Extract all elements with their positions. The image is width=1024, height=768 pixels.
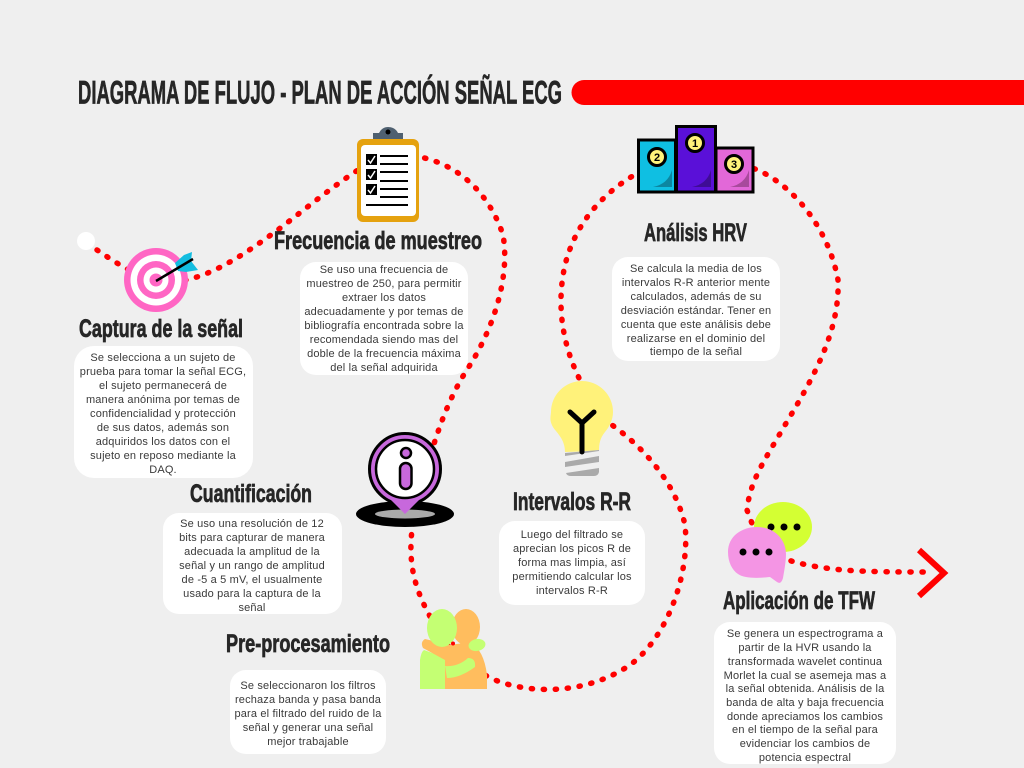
- text card: [300, 262, 468, 375]
- body text: Se genera un espectrograma a: [727, 628, 884, 640]
- heading: Frecuencia de muestreo: [274, 227, 482, 255]
- icon: target with arrow: [124, 248, 198, 312]
- body text: Se uso una frecuencia de: [320, 264, 448, 276]
- body text: para el filtrado del ruido de la: [234, 708, 382, 720]
- body text: extraer los datos: [342, 292, 426, 304]
- body text: calculados, además de su: [630, 291, 762, 303]
- end arrow: [919, 550, 944, 596]
- body text: realizarse en el dominio del: [627, 333, 765, 345]
- panel: intervalos R-R: [499, 488, 645, 605]
- body text: bits para capturar de manera: [179, 532, 326, 544]
- panel: pre-procesamiento: [226, 630, 390, 754]
- body text: manera anónima por temas de: [86, 394, 240, 406]
- icon: light bulb: [550, 381, 613, 476]
- body text: adecuadamente y por temas de: [304, 306, 464, 318]
- body text: sujeto en reposo mediante la: [90, 450, 237, 462]
- body text: usado para la captura de la: [183, 588, 322, 600]
- panel: frecuencia de muestreo: [274, 227, 482, 375]
- icon: speech bubbles: [728, 502, 812, 583]
- body text: confidencialidad y protección: [90, 408, 236, 420]
- body text: del la señal adquirida: [330, 362, 438, 374]
- body text: de sus datos, además son: [97, 422, 229, 434]
- body text: tiempo de la señal: [650, 346, 742, 358]
- body text: Se uso una resolución de 12: [180, 518, 324, 530]
- heading: Captura de la señal: [79, 315, 243, 343]
- body text: en el tiempo de la señal para: [732, 724, 879, 736]
- body text: forma mas limpia, así: [518, 557, 626, 569]
- body text: Luego del filtrado se: [521, 529, 623, 541]
- body text: doble de la frecuencia máxima: [307, 348, 462, 360]
- body text: cuenta que este análisis debe: [621, 319, 771, 331]
- body text: Se seleccionaron los filtros: [240, 680, 376, 692]
- body text: DAQ.: [149, 464, 177, 476]
- body text: Se selecciona a un sujeto de: [90, 352, 236, 364]
- text card: [230, 670, 386, 754]
- icon: podium: 1: [692, 138, 698, 150]
- icon: two people hugging: [420, 609, 487, 689]
- panel: captura de la señal: [74, 315, 253, 478]
- body text: recomendada siendo mas del: [310, 334, 458, 346]
- body text: muestreo de 250, para permitir: [306, 278, 462, 290]
- icon: clipboard checklist: [357, 127, 419, 222]
- body text: adquiridos los datos con el: [96, 436, 230, 448]
- body text: transformada wavelet continua: [728, 656, 883, 668]
- body text: señal y generar una señal: [243, 722, 373, 734]
- title: DIAGRAMA DE FLUJO - PLAN DE ACCIÓN SEÑAL ECG: [78, 74, 562, 110]
- text card: [74, 346, 253, 478]
- panel: cuantificación: [163, 480, 342, 614]
- panel: análisis HRV: [612, 219, 780, 361]
- body text: banda de alta y baja frecuencia: [726, 697, 885, 709]
- body text: Se calcula la media de los: [630, 263, 762, 275]
- text card: [163, 513, 342, 614]
- icon: podium: 2: [654, 152, 660, 164]
- body text: evidenciar los cambios de: [740, 738, 870, 750]
- start marker: [77, 232, 95, 250]
- icon: info location pin: [356, 434, 454, 527]
- body text: de -5 a 5 mV, el usualmente: [182, 574, 322, 586]
- heading: Pre-procesamiento: [226, 630, 390, 658]
- text card: [612, 257, 780, 361]
- icon: podium: [638, 126, 753, 192]
- body text: señal: [238, 602, 266, 614]
- text card: [499, 521, 645, 605]
- panel: aplicación de TFW: [714, 587, 896, 764]
- text card: [714, 622, 896, 764]
- body text: adecuada la amplitud de la: [184, 546, 321, 558]
- body text: Morlet la cual se asemeja mas a: [724, 670, 887, 682]
- heading: Análisis HRV: [644, 219, 747, 247]
- heading: Intervalos R-R: [513, 488, 631, 516]
- icon: podium: 3: [731, 159, 737, 171]
- body text: mejor trabajable: [267, 736, 349, 748]
- body text: permitiendo calcular los: [512, 571, 632, 583]
- body text: intervalos R-R anterior mente: [622, 277, 770, 289]
- heading: Aplicación de TFW: [723, 587, 875, 615]
- dotted flow path: [97, 150, 930, 689]
- title accent bar: [571, 80, 1024, 105]
- body text: la señal obtenida. Análisis de la: [726, 683, 885, 695]
- body text: bibliografía encontrada sobre la: [304, 320, 464, 332]
- body text: partir de la HVR usando la: [738, 642, 872, 654]
- heading: Cuantificación: [190, 480, 312, 508]
- body text: intervalos R-R: [536, 585, 608, 597]
- body text: prueba para tomar la señal ECG,: [80, 366, 246, 378]
- body text: aprecian los picos R de: [513, 543, 631, 555]
- body text: el sujeto permanecerá de: [99, 380, 227, 392]
- body text: rechaza banda y pasa banda: [235, 694, 382, 706]
- body text: señal y un rango de amplitud: [179, 560, 325, 572]
- body text: potencia espectral: [759, 752, 851, 764]
- body text: donde apreciamos los cambios: [727, 711, 883, 723]
- body text: desviación estándar. Tener en: [621, 305, 771, 317]
